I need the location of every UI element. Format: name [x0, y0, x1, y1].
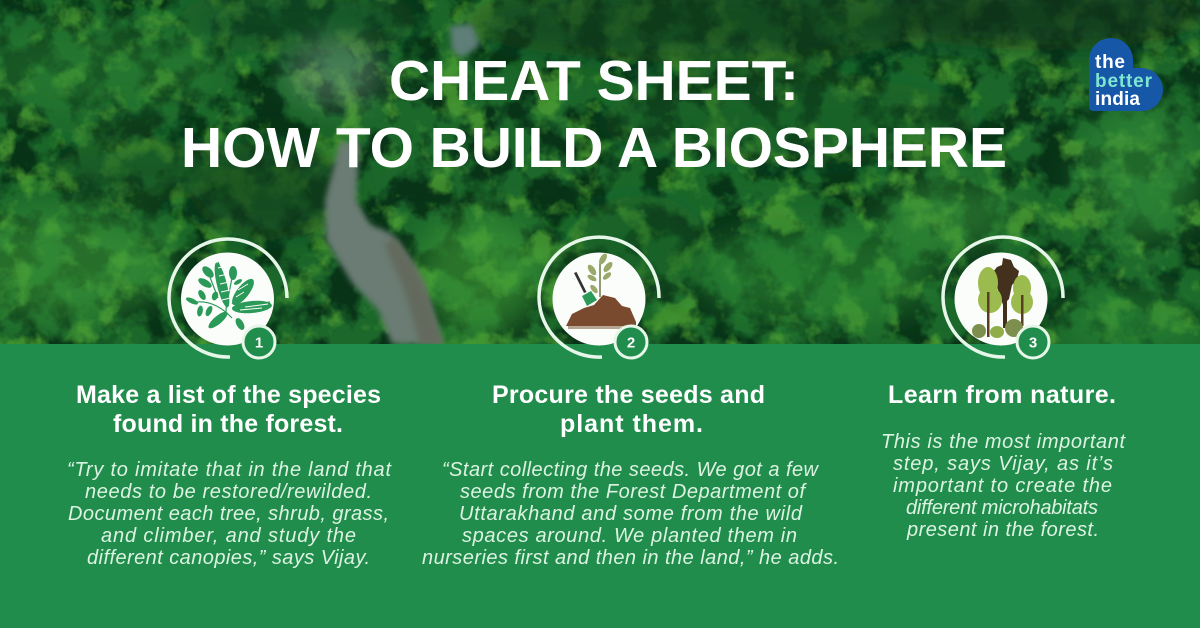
column 2 heading — [492, 381, 765, 438]
column 3 text — [881, 431, 1126, 541]
mist over forest — [285, 38, 385, 106]
logo: the better india — [1089, 38, 1163, 111]
column 2 text: Uttarakhand and some from the wild — [459, 503, 803, 525]
column 3 text: present in the forest. — [906, 519, 1099, 541]
number badge 2: 2 — [627, 334, 635, 352]
title — [181, 49, 1007, 180]
column 2 text: spaces around. We planted them in — [462, 525, 797, 547]
column 1 heading — [76, 381, 381, 438]
column 2 text: nurseries first and then in the land,” he adds. — [422, 547, 839, 569]
column 1 text: needs to be restored/rewilded. — [85, 481, 372, 503]
icon 3: trees — [943, 237, 1063, 358]
logo: the better india: india — [1095, 89, 1140, 110]
column 1 text: “Try to imitate that in the land that — [67, 459, 392, 481]
column 1 text — [67, 459, 392, 569]
column 2 text: “Start collecting the seeds. We got a few — [442, 459, 820, 481]
column 3 text: step, says Vijay, as it’s — [893, 453, 1113, 475]
column 1 heading: found in the forest. — [113, 410, 343, 438]
icon 2: seedling, shovel and soil — [539, 237, 659, 358]
column 1 heading: Make a list of the species — [76, 381, 381, 409]
column 2 text — [422, 459, 839, 569]
icon 1: leaves — [169, 239, 287, 358]
title: CHEAT SHEET: — [389, 49, 799, 113]
column 3 text: important to create the — [893, 475, 1112, 497]
river — [325, 24, 480, 344]
column 1 text: different canopies,” says Vijay. — [87, 547, 370, 569]
column 2 heading: plant them. — [560, 410, 703, 438]
green lower panel — [0, 344, 1200, 628]
forest photo background — [0, 0, 1200, 355]
number badge 1: 1 — [255, 334, 263, 352]
column 3 text: different microhabitats — [906, 497, 1098, 519]
column 1 text: and climber, and study the — [101, 525, 356, 547]
column 2 text: seeds from the Forest Department of — [460, 481, 807, 503]
number badge 3: 3 — [1029, 334, 1037, 352]
title: HOW TO BUILD A BIOSPHERE — [181, 116, 1007, 180]
logo: the better india: the — [1095, 52, 1125, 73]
column 3 heading: Learn from nature. — [888, 381, 1116, 409]
column 2 heading: Procure the seeds and — [492, 381, 765, 409]
column 1 text: Document each tree, shrub, grass, — [68, 503, 389, 525]
logo: the better india: better — [1095, 71, 1153, 92]
column 3 text: This is the most important — [881, 431, 1126, 453]
